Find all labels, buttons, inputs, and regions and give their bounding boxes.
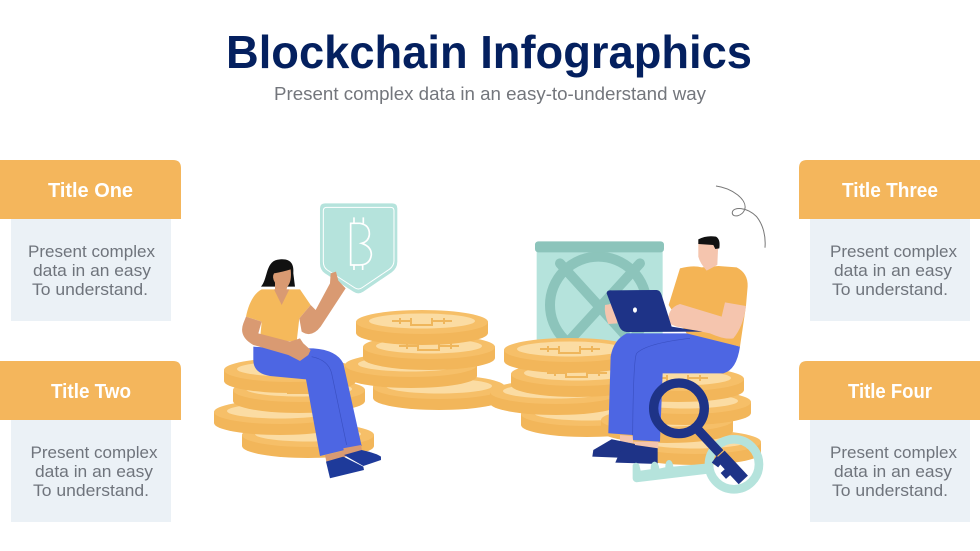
squiggle line: [716, 186, 765, 248]
woman with bitcoin shield: [242, 203, 397, 478]
panel: title two: [0, 361, 181, 522]
panel: title four: Title Four: [848, 381, 932, 403]
icon: teal vault panel: [535, 241, 664, 353]
icon: magnifying glass: [654, 383, 743, 480]
panel: title four: To understand.: [832, 481, 948, 500]
icon: bitcoin shield: [320, 203, 397, 293]
panel: title three: [799, 160, 980, 321]
panel: title three: data in an easy: [834, 261, 953, 280]
panel: title one: Title One: [48, 180, 133, 202]
panel: title one: [0, 160, 181, 321]
panel: title three: Title Three: [842, 180, 938, 202]
panel: title two: Present complex: [30, 443, 158, 462]
panel: title four: [799, 361, 980, 522]
subtitle: Present complex data in an easy-to-understand way: [274, 84, 706, 104]
man with laptop: [592, 186, 765, 489]
coin stack: under man: [601, 367, 761, 465]
panel: title four: data in an easy: [834, 462, 953, 481]
coin stack: centre: [345, 310, 505, 410]
panel: title two: Title Two: [51, 381, 131, 403]
panel: title one: data in an easy: [33, 261, 152, 280]
coin stack: under laptop: [490, 338, 653, 437]
panel: title one: Present complex: [28, 242, 155, 261]
panel: title two: To understand.: [33, 481, 149, 500]
panel: title one: To understand.: [32, 280, 148, 299]
title: Blockchain Infographics: [226, 26, 752, 78]
icon: key: [633, 439, 759, 489]
panel: title four: Present complex: [830, 443, 957, 462]
panel: title three: To understand.: [832, 280, 948, 299]
panel: title three: Present complex: [830, 242, 957, 261]
panel: title two: data in an easy: [35, 462, 154, 481]
coin stack: behind woman: [214, 358, 374, 458]
